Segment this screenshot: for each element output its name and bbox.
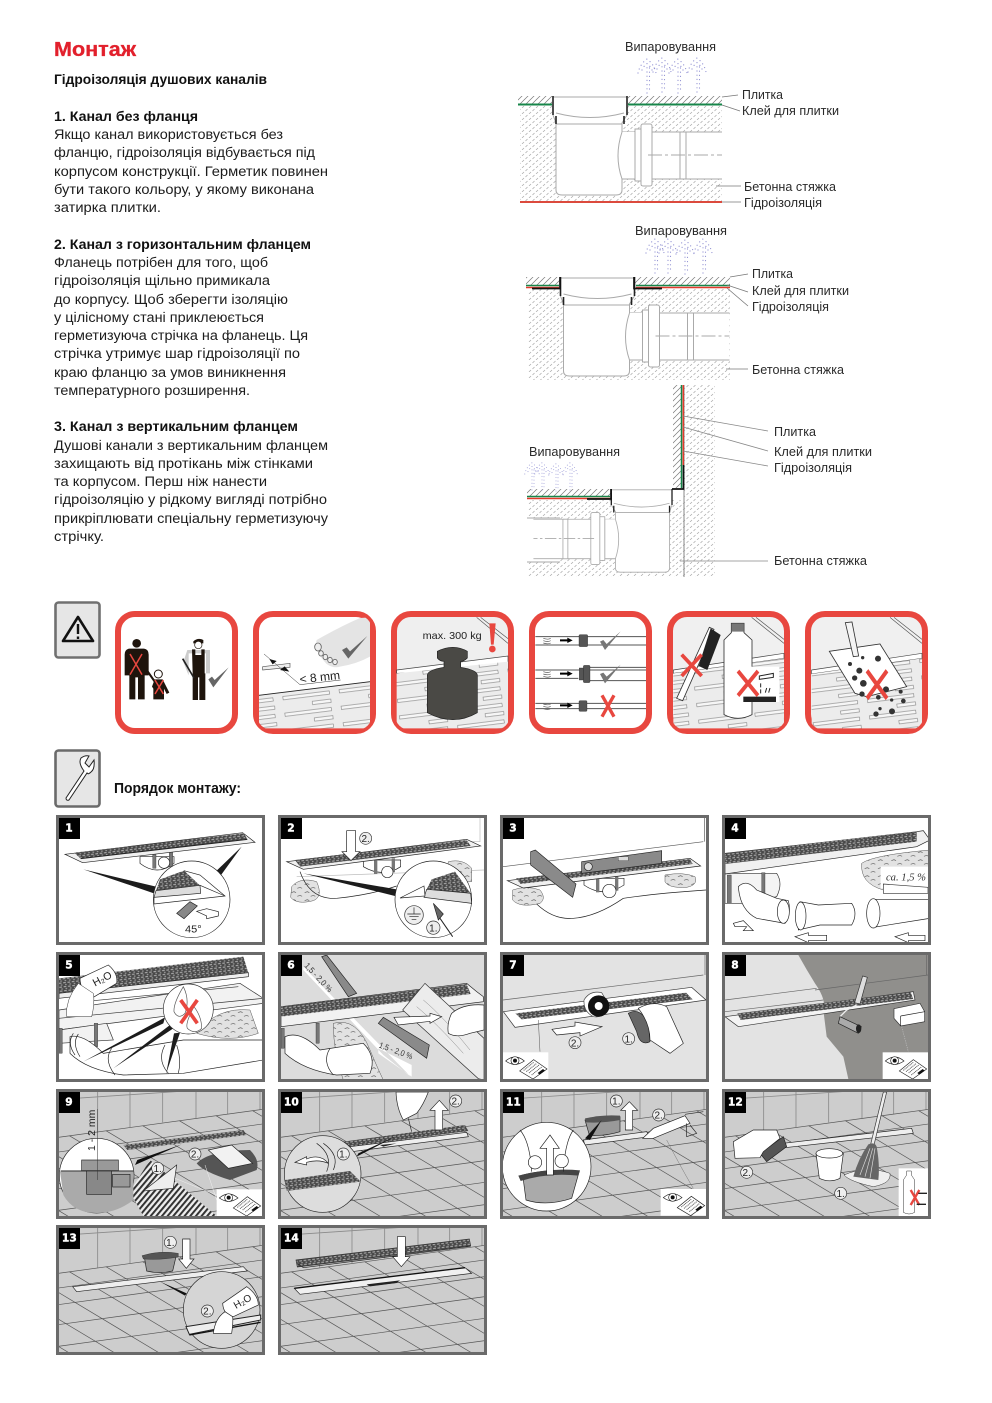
brush and hand <box>628 1011 650 1043</box>
labels <box>529 424 872 568</box>
adult and child crossed out <box>125 639 169 699</box>
section 3 text: 3. Канал з вертикальним фланцем <box>54 419 298 435</box>
panel: step 6: 1,5 - 2,0 % <box>378 1040 415 1061</box>
section 2 text: герметизуюча стрічка на фланець. Ця <box>54 328 308 344</box>
step number 7: 7 <box>509 958 517 971</box>
step number 2 <box>281 818 302 839</box>
section 1 text: фланцю, гідроізоляція відбувається під <box>54 145 316 161</box>
section 3 text: Душові канали з вертикальним фланцем <box>54 438 328 454</box>
step number 14: 14 <box>284 1231 299 1244</box>
section 2 text: Фланець потрібен для того, щоб <box>54 255 268 271</box>
step number 13 <box>59 1228 80 1249</box>
labels: Гідроізоляція <box>744 195 822 210</box>
step number 2: 2 <box>287 821 295 834</box>
labels: Випаровування <box>625 39 716 54</box>
panel: step 12: 2. <box>743 1168 751 1179</box>
evaporation plumes <box>638 58 706 93</box>
panel: step 10: 1. <box>339 1150 347 1161</box>
section 2 text: температурного розширення. <box>54 383 250 399</box>
container <box>894 1003 925 1026</box>
sealant gun <box>643 1116 690 1138</box>
water can <box>80 965 117 998</box>
hand with hook <box>396 1092 428 1120</box>
panel: step 7: 2. <box>571 1038 579 1049</box>
step number 7 <box>503 955 524 976</box>
section 2 text: у цілісному стані приклеюється <box>54 310 264 326</box>
panel: step 4: ca. 1,5 % <box>886 873 926 884</box>
down arrow <box>179 1239 194 1268</box>
brush <box>677 627 714 701</box>
panel: step 1: 45° <box>185 925 202 936</box>
panel: step 13: 1. <box>166 1238 174 1249</box>
panel: step 9: 2. <box>191 1150 199 1161</box>
step number 1 <box>59 818 80 839</box>
pipe parts <box>738 883 789 923</box>
section 3 text: та корпусом. Перш ніж нанести <box>54 474 267 490</box>
section 1 text: бути такого кольору, у якому виконана <box>54 182 314 198</box>
step number 11 <box>503 1092 524 1113</box>
panel: step 4 <box>722 815 931 945</box>
step number 12: 12 <box>728 1095 743 1108</box>
section 1 text: корпусом конструкції. Герметик повинен <box>54 164 328 180</box>
panel: step 2: 2. <box>361 834 370 845</box>
safety tile: slot width under 8 mm <box>256 614 373 731</box>
section 1 text: Якщо канал використовується без <box>54 127 283 143</box>
step number 3: 3 <box>509 821 517 834</box>
slot dimension <box>263 663 290 670</box>
labels: Клей для плитки <box>742 103 839 118</box>
labels <box>635 223 849 377</box>
panel: step 2: 1. <box>429 923 437 934</box>
foot <box>316 617 370 667</box>
tape roll <box>584 992 610 1017</box>
panel: step 7 <box>500 952 709 1082</box>
panel: step 13 <box>0 1222 403 1382</box>
step number 12 <box>725 1092 746 1113</box>
panel: step 9 <box>56 1089 265 1219</box>
section 2 text: 2. Канал з горизонтальним фланцем <box>54 237 311 253</box>
sponge and hand <box>760 1137 787 1162</box>
up arrow <box>430 1100 448 1130</box>
section 2 text: стрічка утримує шар гідроізоляції по <box>54 346 300 362</box>
title: Монтаж <box>54 39 137 61</box>
section 1 text: 1. Канал без фланця <box>54 109 198 125</box>
arrows <box>733 921 753 931</box>
step number 14 <box>281 1228 302 1249</box>
labels: Випаровування <box>635 223 727 238</box>
section 1 text <box>54 109 328 216</box>
floor level <box>378 1017 429 1058</box>
safety tile: no debris <box>808 614 925 731</box>
step number 9: 9 <box>65 1095 73 1108</box>
step number 13: 13 <box>62 1231 77 1244</box>
panel: step 9: 1 - 2 mm <box>87 1110 98 1151</box>
panel: step 10 <box>145 1086 625 1246</box>
down arrow <box>393 1237 410 1267</box>
panel: step 13: H₂O <box>232 1293 254 1312</box>
roller <box>855 976 867 1004</box>
step number 6 <box>281 955 302 976</box>
section 1 text: затирка плитки. <box>54 200 161 216</box>
panel: step 6 <box>278 952 487 1082</box>
arrow <box>394 1013 442 1025</box>
magnifier <box>183 1272 260 1348</box>
panel: step 12 <box>589 1086 992 1246</box>
icon: warning box <box>56 602 100 658</box>
panel: step 1 <box>56 815 265 945</box>
evaporation plumes <box>525 463 577 491</box>
labels: Бетонна стяжка <box>774 553 868 568</box>
leak wedges <box>83 1017 180 1074</box>
section 2 text: до корпусу. Щоб зберегти ізоляцію <box>54 292 288 308</box>
arrow <box>552 1022 602 1036</box>
labels <box>625 39 839 210</box>
labels: Плитка <box>742 87 784 102</box>
section 3 text: стрічку. <box>54 529 104 545</box>
panel: step 11: 2. <box>655 1111 663 1122</box>
trowel <box>143 1165 177 1191</box>
labels: Плитка <box>752 266 794 281</box>
spirit levels <box>531 850 576 897</box>
step number 11: 11 <box>506 1095 521 1108</box>
heading: installation order: Порядок монтажу: <box>114 781 241 797</box>
safety tile: slot width under 8 mm: < 8 mm <box>299 668 341 686</box>
panel: step 5 <box>56 952 265 1082</box>
labels: Бетонна стяжка <box>744 179 837 194</box>
step number 8: 8 <box>731 958 739 971</box>
magnifier <box>284 1136 361 1212</box>
panel: step 11 <box>367 1086 847 1246</box>
section 3 text: захищають від протікань між стінками <box>54 456 313 472</box>
section 2 text <box>54 237 311 399</box>
safety tile: qualified installer <box>118 614 235 731</box>
push arrow <box>342 831 360 861</box>
safety tile: max load 300 kg: max. 300 kg <box>423 631 482 642</box>
no chemicals inset <box>899 1168 928 1216</box>
diagram: channel with vertical flange <box>525 385 872 577</box>
step number 5 <box>59 955 80 976</box>
panel: step 10: 2. <box>451 1097 460 1108</box>
evaporation plumes <box>646 239 712 274</box>
dustpan <box>829 644 907 697</box>
icon: wrench box <box>56 750 100 806</box>
safety tile: pipe diameter check <box>532 614 649 731</box>
step number 9 <box>59 1092 80 1113</box>
labels: Плитка <box>774 424 817 439</box>
weight <box>427 647 477 720</box>
safety tile: no brush or chemicals <box>670 614 787 731</box>
mop with puddle <box>844 1170 890 1187</box>
step number 1: 1 <box>65 821 73 834</box>
section 3 text <box>54 419 329 545</box>
bottle <box>724 623 752 718</box>
labels: Гідроізоляція <box>752 299 829 314</box>
labels: Гідроізоляція <box>774 460 852 475</box>
magnifier <box>502 1122 591 1211</box>
diagram: channel with horizontal flange <box>526 223 849 380</box>
trowel board <box>403 983 484 1080</box>
combed adhesive <box>130 1160 217 1216</box>
panel: step 9: 1. <box>154 1164 162 1175</box>
text block: waterproofing instructions <box>54 72 329 545</box>
panel: step 14 <box>145 1222 625 1382</box>
no water circle <box>163 984 213 1034</box>
step number 8 <box>725 955 746 976</box>
panel: step 13: 2. <box>203 1307 211 1318</box>
step number 4: 4 <box>731 821 739 834</box>
panel: step 6: 1,5 - 2,0 % <box>303 961 335 995</box>
labels: Випаровування <box>529 444 620 459</box>
labels: Бетонна стяжка <box>752 362 845 377</box>
basket <box>144 1257 176 1273</box>
magnifier <box>59 1138 134 1213</box>
step number 5: 5 <box>65 958 73 971</box>
section 3 text: гідроізоляцію у рідкому вигляді потрібно <box>54 492 327 508</box>
panel: step 5: H₂O <box>91 969 114 989</box>
up arrow <box>621 1102 638 1130</box>
section 2 text: гідроізоляція щільно примикала <box>54 273 270 289</box>
slope label <box>881 867 928 888</box>
safety tile: max load 300 kg <box>394 614 511 731</box>
panel: step 2 <box>278 815 487 945</box>
panel: step 12: 1. <box>836 1189 845 1200</box>
section 3 text: прикріплювати спеціальну герметизуючу <box>54 511 329 527</box>
hand <box>448 1005 484 1036</box>
installer with wrench <box>183 639 229 700</box>
panel: step 8 <box>722 952 931 1082</box>
adhesive bucket <box>197 1150 257 1180</box>
panel: step 3 <box>500 815 709 945</box>
bucket <box>816 1151 843 1181</box>
step number 3 <box>503 818 524 839</box>
step number 4 <box>725 818 746 839</box>
subtitle: Гідроізоляція душових каналів <box>54 72 267 88</box>
step number 6: 6 <box>287 958 295 971</box>
labels: Клей для плитки <box>752 283 849 298</box>
diagram: channel without flange <box>518 39 839 210</box>
step number 10: 10 <box>284 1095 299 1108</box>
panel: step 11: 1. <box>612 1097 620 1108</box>
labels: Клей для плитки <box>774 444 872 459</box>
step number 10 <box>281 1092 302 1113</box>
exclamation <box>489 623 496 645</box>
pipe elbows <box>70 1036 263 1075</box>
panel: step 7: 1. <box>625 1034 633 1045</box>
section 2 text: краю фланцю за умов виникнення <box>54 365 286 381</box>
